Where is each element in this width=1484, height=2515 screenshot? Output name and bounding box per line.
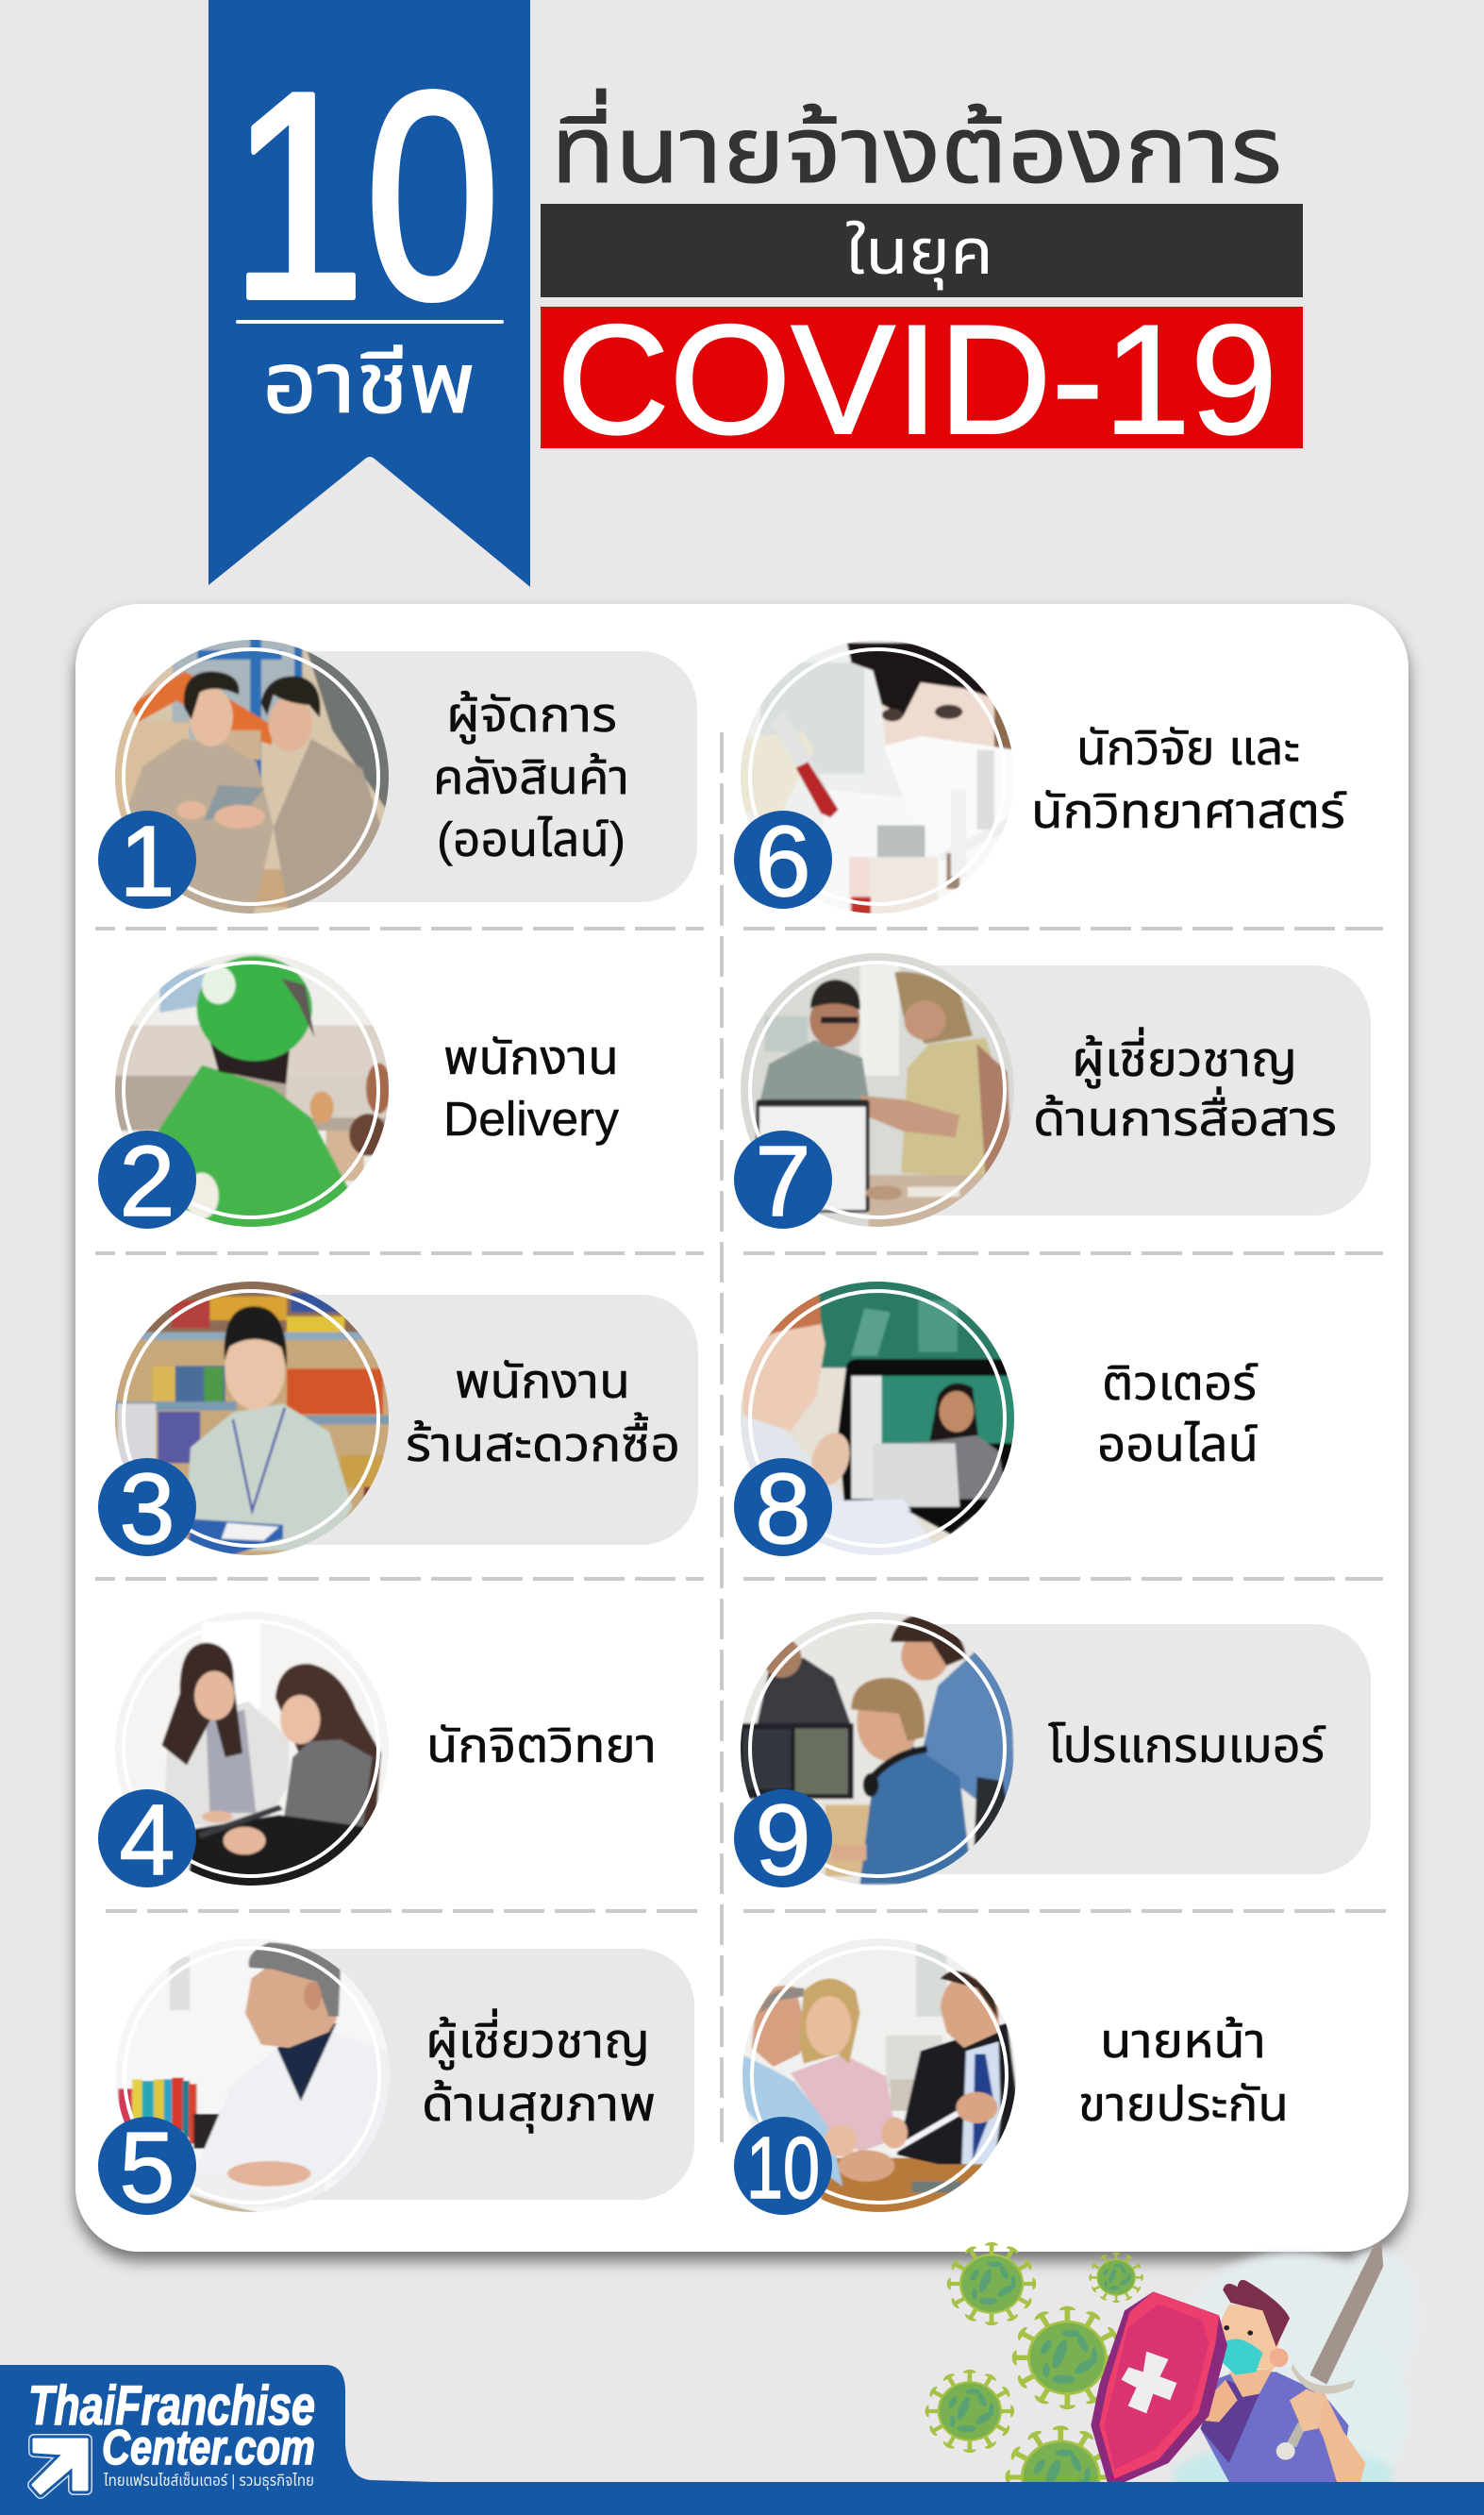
footer band and logo tab: [0, 2365, 1484, 2515]
job title: [1033, 1027, 1337, 1146]
pill background: [877, 1624, 1371, 1874]
job title: พนักงาน: [455, 1354, 630, 1408]
photo: delivery rider: [115, 953, 389, 1227]
dark bar: in the era of: ในยุค: [845, 217, 993, 291]
item 8: online tutor: [734, 1277, 1259, 1565]
ring: [752, 1948, 1007, 2203]
photo: online tutor on tablet: [734, 1277, 1020, 1563]
photo: doctor at desk: [110, 1935, 396, 2218]
job title: Delivery: [443, 1092, 620, 1146]
ring: [124, 649, 378, 904]
pill background: [252, 651, 697, 902]
logo: ThaiFranchise Center.com: [28, 2375, 315, 2493]
job title: ติวเตอร์: [1102, 1356, 1259, 1410]
dividers: [95, 732, 1390, 2142]
job title: [1097, 1356, 1259, 1471]
number badge: [734, 1126, 832, 1237]
number badge: 6: [756, 806, 810, 917]
item 7: communications specialist: [734, 948, 1371, 1237]
number badge: [98, 1126, 196, 1237]
job title: [433, 688, 629, 866]
ring: [125, 1948, 379, 2203]
icon: logo arrow: [33, 2440, 87, 2493]
divider under number: [236, 320, 504, 324]
title line: what employers want: ที่นายจ้างต้องการ: [551, 89, 1282, 202]
number badge: 2: [120, 1126, 175, 1237]
number badge: 4: [120, 1785, 175, 1896]
item 5: health specialist: [98, 1935, 694, 2223]
number badge: 5: [120, 2112, 175, 2223]
item 1: warehouse manager: [98, 633, 697, 920]
number badge: [98, 1785, 196, 1896]
job title: โปรแกรมเมอร์: [1048, 1719, 1326, 1772]
job title: (ออนไลน์): [437, 813, 625, 866]
number badge: [98, 1453, 196, 1565]
item 3: convenience store staff: [98, 1277, 698, 1565]
photo: warehouse workers: [109, 633, 395, 920]
job title: [406, 1354, 680, 1471]
dark bar: in the era of: [541, 204, 1303, 297]
item 10: insurance broker: [734, 1935, 1289, 2218]
sword: [1276, 2239, 1383, 2460]
ring: [750, 963, 1005, 1217]
number badge: 10: [746, 2119, 820, 2217]
ring: [124, 1621, 378, 1876]
job title: [422, 2008, 656, 2134]
title block: [541, 89, 1303, 466]
red bar: COVID-19: COVID-19: [557, 293, 1277, 466]
job title: ร้านสะดวกซื้อ: [406, 1412, 680, 1471]
number badge: [734, 806, 832, 917]
ring: [124, 963, 378, 1217]
item 9: programmer: [734, 1606, 1371, 1896]
ring: [124, 1291, 378, 1546]
big number 10: 10: [230, 32, 500, 360]
item 2: delivery staff: [98, 946, 620, 1240]
pill background: [252, 1295, 698, 1545]
logo tagline: ไทยแฟรนไชส์เซ็นเตอร์ | รวมธุรกิจไทย: [103, 2472, 314, 2490]
item 4: psychologist: [98, 1606, 657, 1896]
number badge: [734, 1785, 832, 1896]
pill background: [252, 1949, 694, 2200]
number badge: 9: [756, 1785, 810, 1896]
number badge: [734, 1453, 832, 1565]
photo: broker with couple: [739, 1935, 1025, 2218]
job title: [443, 1031, 620, 1146]
ribbon shape: [208, 0, 530, 587]
job title: ผู้เชี่ยวชาญ: [1072, 1027, 1297, 1089]
logo wordmark line 1: ThaiFranchise: [28, 2375, 315, 2437]
hero figure: [1200, 2280, 1365, 2482]
photo: psychologist and client: [109, 1606, 394, 1892]
job title: นักวิจัย และ: [1076, 721, 1300, 775]
job title: นักวิทยาศาสตร์: [1031, 784, 1347, 838]
pale background blobs: [1170, 2244, 1402, 2482]
ring: [750, 1291, 1005, 1546]
icon: viruses: [925, 2242, 1143, 2515]
job title: [1031, 721, 1347, 838]
photo: programmers at monitor: [734, 1606, 1020, 1888]
illustration: hero with shield fighting viruses: [925, 2239, 1421, 2515]
job title: นักจิตวิทยา: [426, 1719, 657, 1772]
number badge: 8: [756, 1453, 810, 1565]
shield with cross: [1091, 2291, 1227, 2484]
ring: [750, 649, 1005, 904]
job title: ขายประกัน: [1078, 2077, 1289, 2131]
job title: [1078, 2014, 1289, 2131]
ribbon: 10 careers: [208, 0, 530, 587]
number badge: [98, 2112, 196, 2223]
number badge: 7: [756, 1126, 810, 1237]
job title: ผู้จัดการ: [446, 688, 617, 745]
logo wordmark line 2: Center.com: [102, 2421, 315, 2475]
number badge: 3: [120, 1453, 175, 1565]
job title: ด้านการสื่อสาร: [1033, 1086, 1337, 1146]
ring: [750, 1621, 1005, 1876]
job title: คลังสินค้า: [433, 750, 629, 804]
job title: ออนไลน์: [1097, 1417, 1259, 1471]
label: careers: อาชีพ: [262, 337, 475, 431]
job title: พนักงาน: [443, 1031, 619, 1084]
item 6: researcher and scientist: [734, 635, 1347, 921]
photo: office colleagues: [734, 948, 1020, 1234]
job title: ผู้เชี่ยวชาญ: [425, 2008, 650, 2071]
white panel: [75, 604, 1409, 2252]
photo: store clerk: [109, 1277, 394, 1563]
pill background: [877, 965, 1371, 1216]
job title: นายหน้า: [1100, 2014, 1266, 2068]
number badge: [98, 806, 196, 917]
photo: lab researcher: [734, 635, 1020, 921]
job title: ด้านสุขภาพ: [422, 2077, 656, 2134]
number badge: 1: [120, 806, 175, 917]
